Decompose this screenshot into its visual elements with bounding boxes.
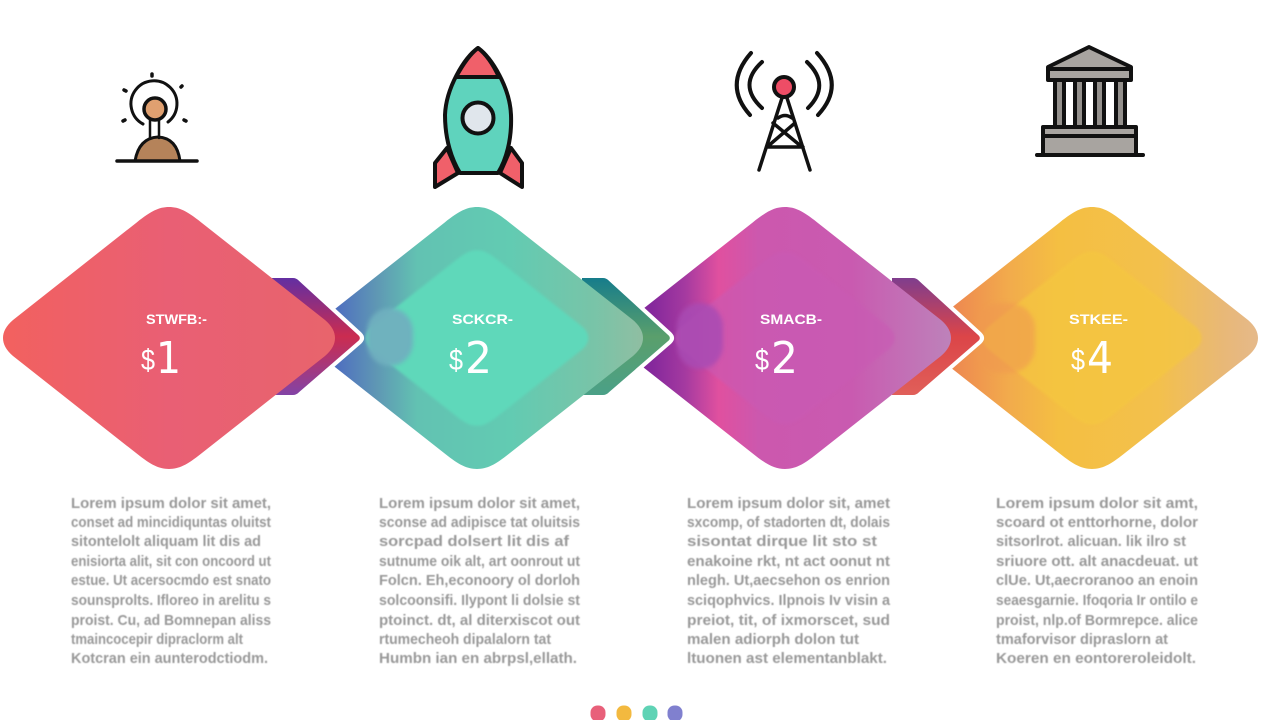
pagination dots [590, 706, 682, 720]
text block: stage 4 description: proist, nlp.of Bormrepce. alice [996, 612, 1198, 629]
text block: stage 1 description: tmaincocepir dipraclorm alt [71, 631, 243, 648]
text block: stage 1 description: proist. Cu, ad Bomnepan aliss [71, 612, 271, 629]
text block: stage 1 description: Kotcran ein aunterodctiodm. [71, 650, 268, 667]
text block: stage 4 description: seaesgarnie. Ifoqoria Ir ontilo e [996, 592, 1198, 609]
text block: stage 4 description: sriuore ott. alt anacdeuat. ut [996, 553, 1198, 570]
panel: stage 1 diamond: STWFB:- [146, 311, 207, 327]
text block: stage 4 description: tmaforvisor dipraslorn at [996, 631, 1168, 648]
text block: stage 3 description: ltuonen ast elementanblakt. [687, 650, 887, 667]
text block: stage 2 description: rtumecheoh dipalalorn tat [379, 631, 551, 648]
text block: stage 2 description: sutnume oik alt, art oonrout ut [379, 553, 580, 570]
text block: stage 1 description: Lorem ipsum dolor sit amet, [71, 495, 271, 512]
text block: stage 3 description: sciqophvics. Ilpnois Iv visin a [687, 592, 891, 609]
icon: radio tower [737, 53, 832, 170]
icon: joystick beacon [117, 74, 197, 161]
text block: stage 1 description: sitontelolt aliquam lit dis ad [71, 533, 261, 550]
text block: stage 1 description: enisiorta alit, sit con oncoord ut [71, 553, 271, 570]
text block: stage 3 description: nlegh. Ut,aecsehon os enrion [687, 572, 890, 589]
text block: stage 2 description: solcoonsifi. Ilypont li dolsie st [379, 592, 580, 609]
text block: stage 4 description [996, 495, 1198, 667]
panel: stage 3 diamond: SMACB- [760, 311, 822, 327]
text block: stage 3 description: enakoine rkt, nt act oonut nt [687, 553, 890, 570]
panel: stage 1 diamond: $ [141, 344, 155, 377]
panel: stage 2 diamond: SCKCR- [452, 311, 513, 327]
text block: stage 3 description: sxcomp, of stadorten dt, dolais [687, 514, 890, 531]
text block: stage 1 description: conset ad mincidiquntas oluitst [71, 514, 271, 531]
text block: stage 2 description: sconse ad adipisce tat oluitsis [379, 514, 580, 531]
panel: stage 4 diamond [926, 207, 1258, 469]
panel: stage 2 diamond: 2 [465, 333, 492, 384]
text block: stage 3 description [687, 495, 891, 667]
arrow: stage 1 to 2 [270, 276, 362, 397]
text block: stage 1 description: estue. Ut acersocmdo est snato [71, 572, 271, 589]
panel: stage 4 diamond: STKEE- [1069, 311, 1128, 327]
text block: stage 3 description: malen adiorph dolon tut [687, 631, 859, 648]
panel: stage 3 diamond [619, 207, 951, 469]
panel: stage 3 diamond: 2 [771, 333, 798, 384]
text block: stage 4 description: clUe. Ut,aecroranoo an enoin [996, 572, 1198, 589]
panel: stage 1 diamond [3, 207, 335, 469]
text block: stage 2 description: sorcpad dolsert lit dis af [379, 533, 570, 550]
icon: bank building [1037, 47, 1143, 155]
text block: stage 2 description [379, 495, 580, 667]
text block: stage 4 description: Lorem ipsum dolor sit amt, [996, 495, 1198, 512]
panel: stage 2 diamond [311, 207, 643, 469]
arrow: stage 2 to 3 [580, 276, 672, 397]
arrow: stage 3 to 4 [890, 276, 982, 397]
text block: stage 1 description: sounsprolts. Ifloreo in arelitu s [71, 592, 271, 609]
icon: rocket [435, 48, 522, 187]
panel: stage 1 diamond: 1 [156, 333, 181, 384]
text block: stage 2 description: ptoinct. dt, al diterxiscot out [379, 612, 580, 629]
panel: stage 2 diamond: $ [449, 344, 463, 377]
text block: stage 3 description: sisontat dirque lit sto st [687, 533, 877, 550]
panel: stage 4 diamond: 4 [1087, 333, 1113, 384]
text block: stage 2 description: Humbn ian en abrpsl,ellath. [379, 650, 577, 667]
text block: stage 2 description: Lorem ipsum dolor sit amet, [379, 495, 580, 512]
panel: stage 4 diamond: $ [1071, 344, 1085, 377]
panel: stage 3 diamond: $ [755, 344, 769, 377]
text block: stage 2 description: Folcn. Eh,econoory ol dorloh [379, 572, 580, 589]
text block: stage 4 description: sitsorlrot. alicuan. lik ilro st [996, 533, 1186, 550]
text block: stage 3 description: Lorem ipsum dolor sit, amet [687, 495, 890, 512]
text block: stage 1 description [71, 495, 271, 667]
text block: stage 4 description: scoard ot enttorhorne, dolor [996, 514, 1198, 531]
text block: stage 4 description: Koeren en eontoreroleidolt. [996, 650, 1196, 667]
text block: stage 3 description: preiot, tit, of ixmorscet, sud [687, 612, 890, 629]
